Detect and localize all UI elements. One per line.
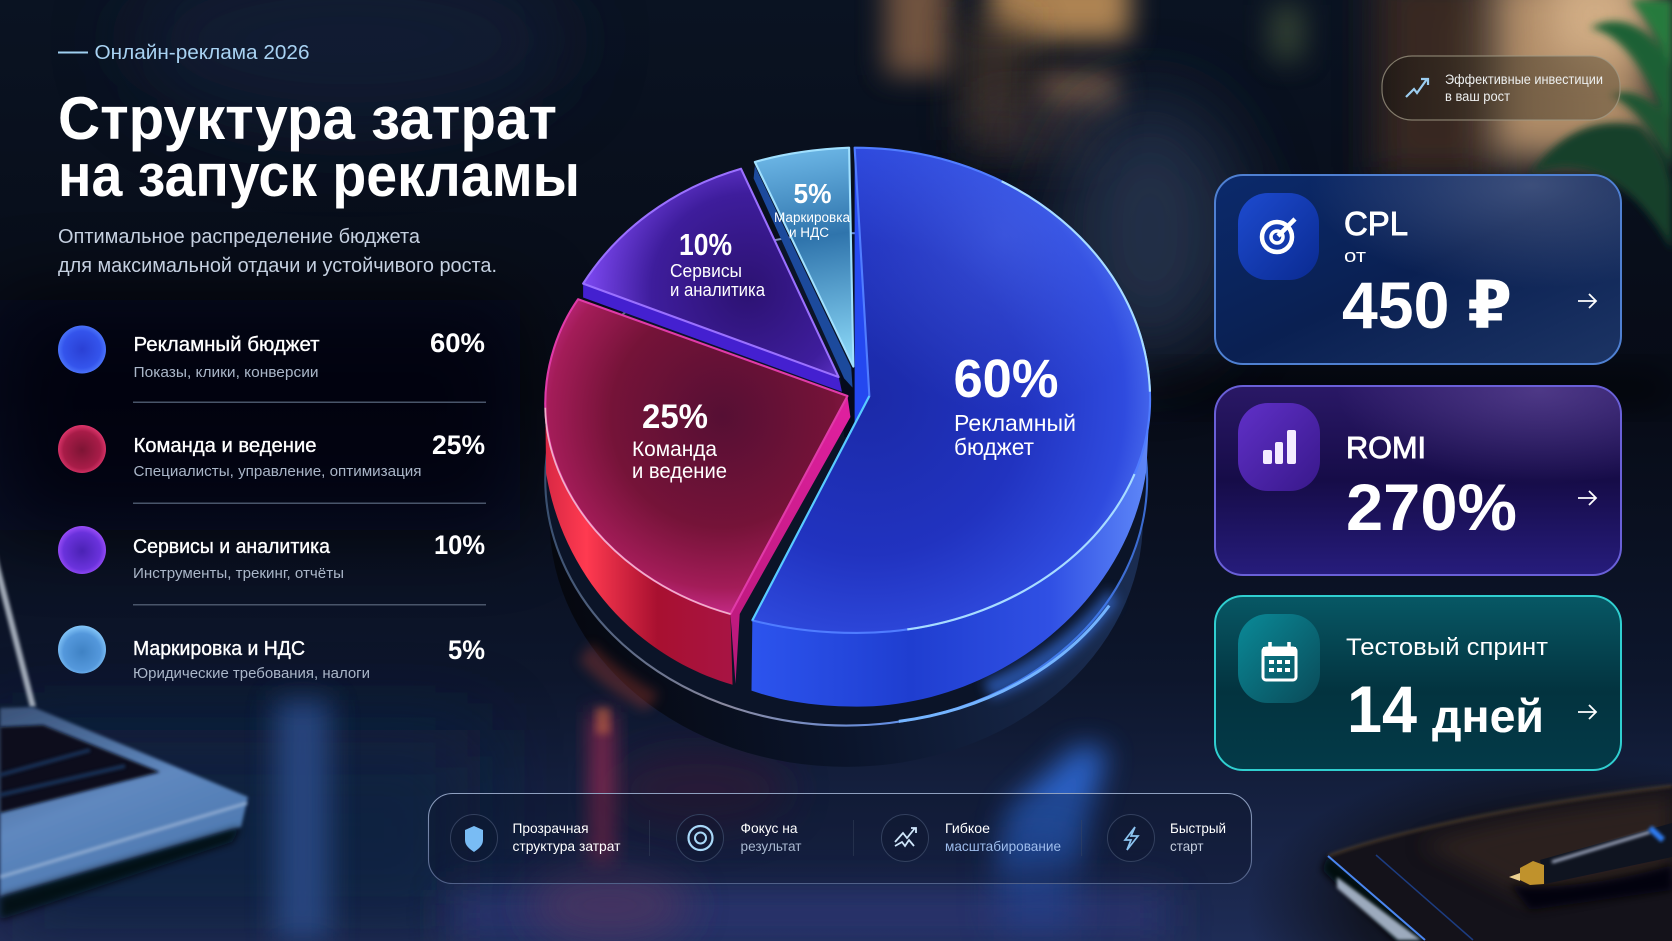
benefit: flexible scaling: Гибкое (945, 820, 990, 836)
pie label: 5%: Маркировка (774, 210, 850, 225)
benefit: fast start (1108, 814, 1226, 862)
pie label: 5% (774, 178, 850, 240)
pie label: 25%: 25% (642, 398, 708, 436)
pie label: 25%: и ведение (632, 460, 727, 483)
benefit: focus on result: Фокус на (740, 820, 798, 836)
legend item: ad budget (58, 326, 485, 381)
subtitle: Оптимальное распределение бюджета (58, 226, 421, 248)
benefit: fast start: Быстрый (1170, 820, 1226, 836)
pie label: 5%: и НДС (789, 225, 829, 240)
light blue slice (754, 148, 853, 388)
legend item: labeling: Маркировка и НДС (133, 638, 305, 660)
benefit: focus on result (676, 814, 802, 862)
legend item: ad budget: 60% (430, 328, 485, 358)
benefit: flexible scaling (882, 814, 1061, 862)
pie label: 10%: 10% (679, 227, 732, 262)
benefit: fast start: старт (1170, 838, 1204, 854)
card: ROMI: 270% (1346, 470, 1517, 544)
eyebrow label: Онлайн-реклама 2026 (94, 42, 310, 64)
icon: calendar (1238, 614, 1320, 703)
card: CPL (1215, 175, 1621, 364)
legend item: services (58, 526, 485, 582)
legend item: services: 10% (434, 530, 485, 560)
legend item: labeling: 5% (448, 635, 485, 665)
title: Структура затрат (58, 85, 557, 152)
badge: effective investments: в ваш рост (1445, 89, 1510, 104)
badge: effective investments: Эффективные инвестиции (1445, 72, 1603, 87)
notebook and pen (1322, 786, 1672, 941)
card: ROMI: ROMI (1346, 430, 1426, 465)
subtitle (58, 226, 497, 277)
legend item: team (58, 425, 485, 480)
pie label: 60%: Рекламный (954, 410, 1076, 436)
card: test sprint (1215, 596, 1621, 770)
purple slice (583, 169, 842, 392)
pie label: 60%: бюджет (954, 434, 1034, 460)
pie label: 60% (954, 349, 1076, 460)
center gap (840, 366, 861, 437)
legend item: ad budget: Рекламный бюджет (134, 334, 320, 356)
benefit: transparent cost structure: структура затрат (512, 838, 621, 854)
icon: bars (1238, 403, 1320, 491)
bottom benefits bar (428, 794, 1252, 884)
card: test sprint: дней (1432, 690, 1544, 742)
pie label: 10%: Сервисы (670, 261, 742, 281)
pie base plate (545, 233, 1147, 767)
card: ROMI (1215, 386, 1621, 575)
pie label: 5%: 5% (794, 178, 832, 209)
red slice (545, 299, 850, 685)
pie label: 25%: Команда (632, 438, 717, 461)
arrow (1578, 491, 1596, 505)
3D pie chart (545, 148, 1150, 767)
benefit: flexible scaling: масштабирование (945, 838, 1061, 854)
card: CPL: 450 ₽ (1342, 268, 1512, 342)
blue slice (751, 148, 1150, 707)
legend (58, 326, 486, 682)
title: на запуск рекламы (58, 142, 580, 209)
badge: effective investments (1382, 56, 1620, 120)
legend item: labeling: Юридические требования, налоги (133, 665, 370, 682)
benefit: focus on result: результат (740, 838, 802, 854)
pie label: 10% (670, 227, 766, 300)
legend item: services: Инструменты, трекинг, отчёты (133, 565, 344, 582)
benefit: transparent cost structure: Прозрачная (512, 820, 588, 836)
title (58, 85, 580, 209)
plant decoration (1530, 0, 1672, 250)
card: test sprint: Тестовый спринт (1346, 634, 1548, 661)
pie label: 25% (632, 398, 727, 483)
legend item: team: 25% (432, 430, 485, 460)
legend item: team: Специалисты, управление, оптимизация (134, 463, 422, 480)
legend item: ad budget: Показы, клики, конверсии (134, 364, 318, 381)
legend item: services: Сервисы и аналитика (133, 536, 331, 558)
arrow (1578, 294, 1596, 308)
benefit: transparent cost structure (450, 814, 621, 862)
pie label: 10%: и аналитика (670, 280, 766, 300)
legend item: labeling (58, 626, 485, 682)
icon: growth line (1406, 79, 1428, 97)
arrow (1578, 705, 1596, 719)
card: CPL: CPL (1344, 205, 1408, 242)
laptop (0, 555, 248, 920)
icon: target (1238, 193, 1319, 280)
card: CPL: от (1344, 246, 1366, 266)
legend item: team: Команда и ведение (134, 435, 316, 457)
card: test sprint: 14 (1347, 672, 1417, 746)
pie label: 60%: 60% (954, 349, 1058, 409)
subtitle: для максимальной отдачи и устойчивого роста. (58, 255, 497, 277)
